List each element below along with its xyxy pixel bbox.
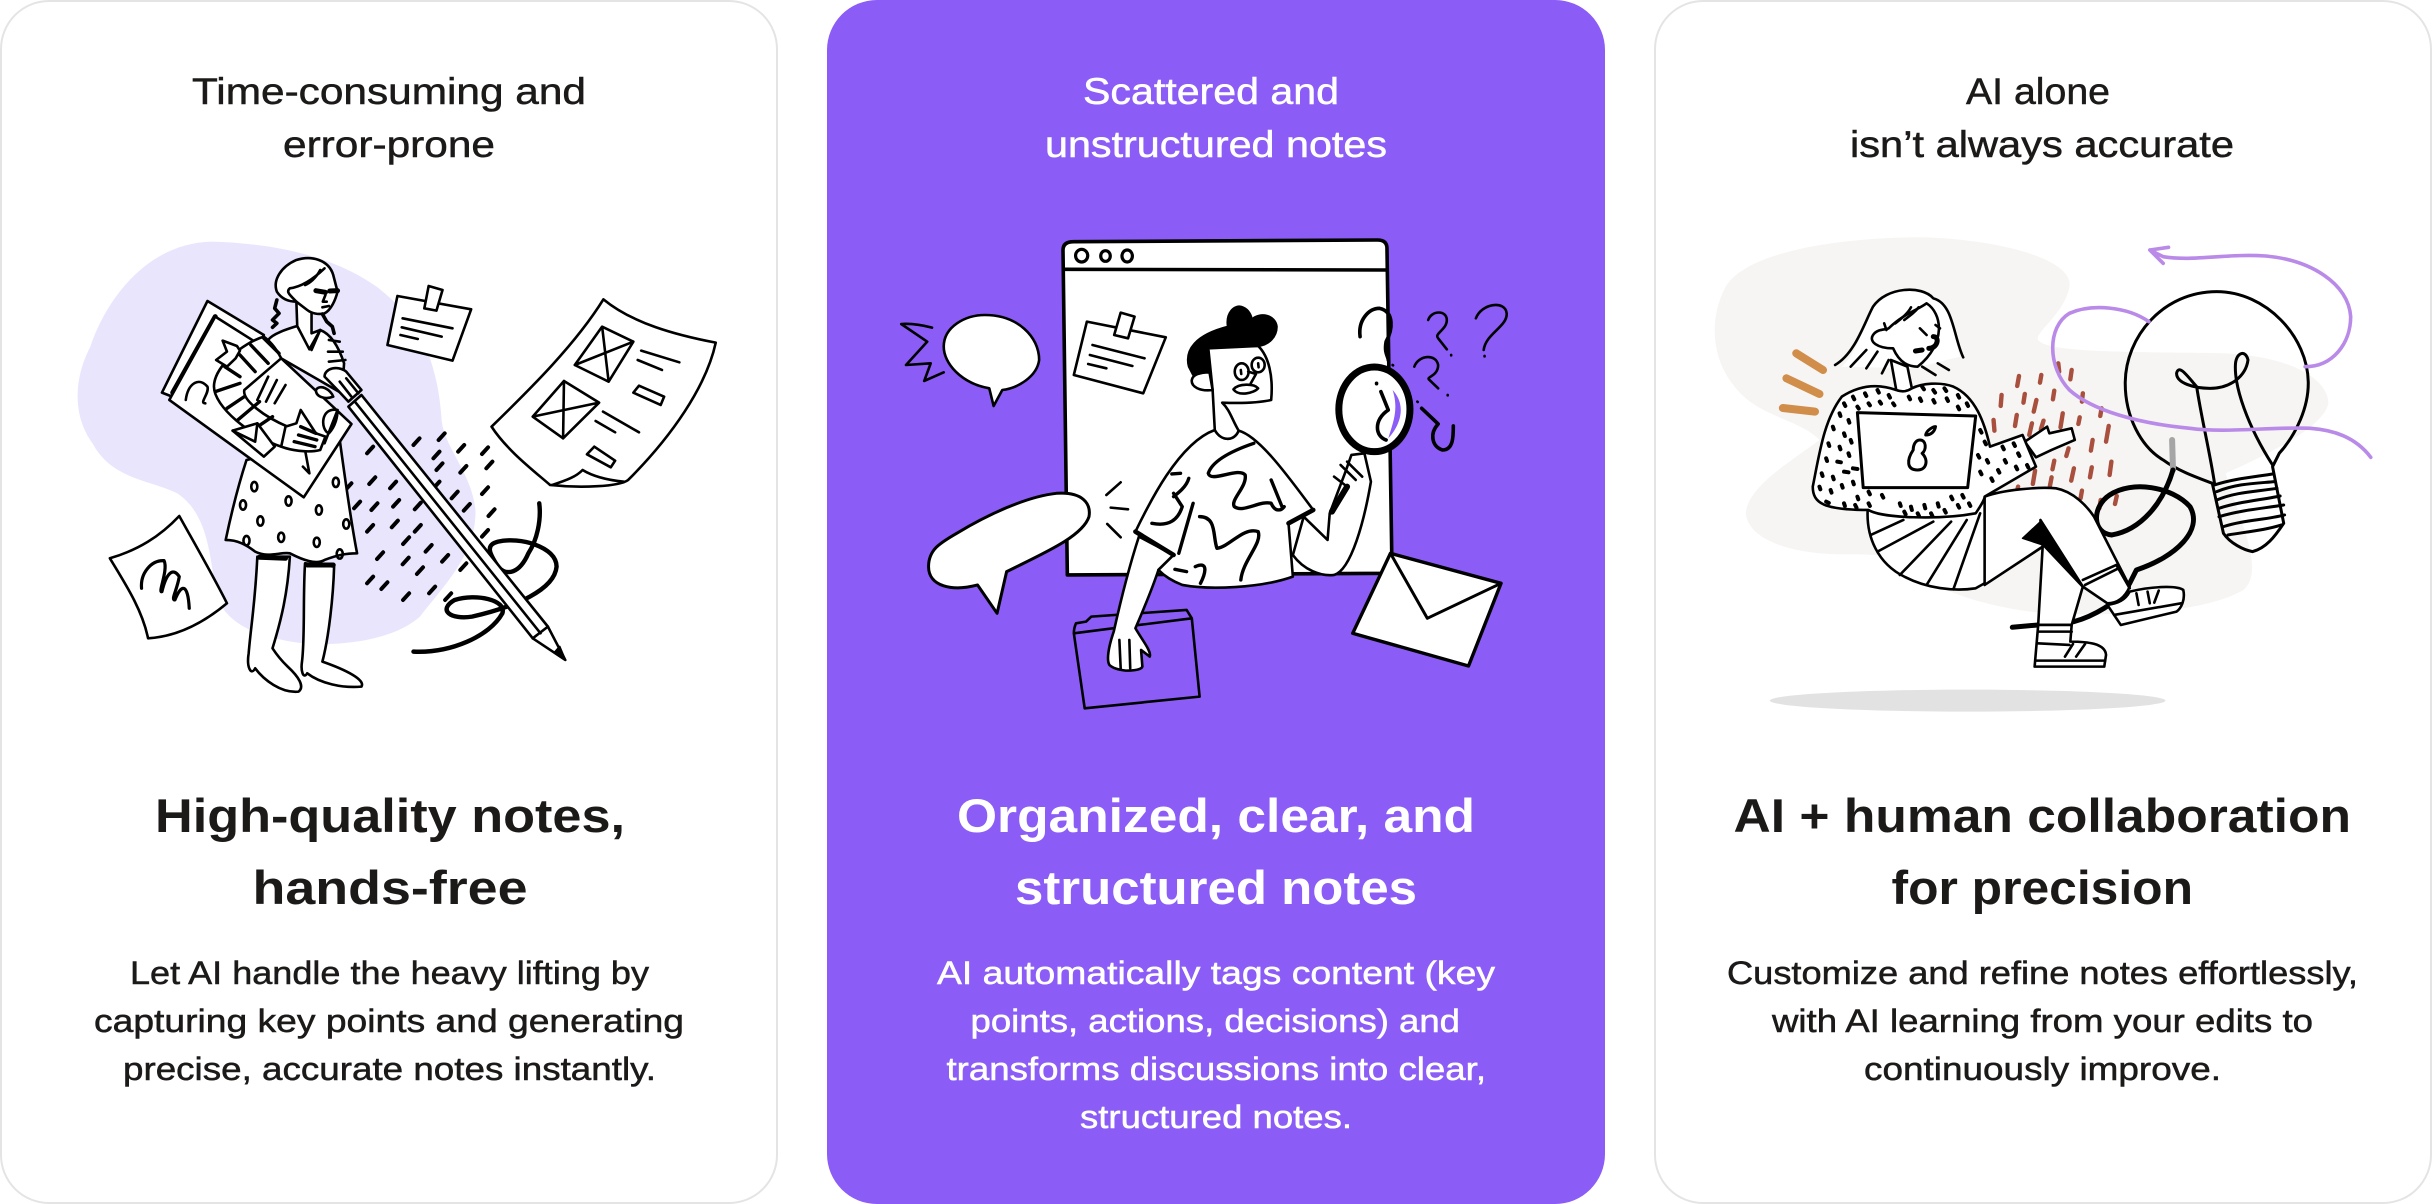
text: card 3 problem statement <box>1850 71 2234 165</box>
illustration: woman holding giant pencil <box>78 242 716 692</box>
panel: card 3 AI and human collaboration <box>1655 1 2431 1203</box>
icon: orange emphasis marks <box>1783 353 1823 412</box>
text: card 1 description <box>94 955 684 1087</box>
heading: card 1 benefit: High-quality notes, <box>155 789 625 842</box>
text: card 3 description <box>1727 955 2358 1087</box>
icon: pinned note <box>387 286 471 361</box>
figure: woman <box>162 258 362 692</box>
icon: light bulb <box>2125 292 2308 552</box>
text: card 2 description: points, actions, decisions) and <box>970 1003 1460 1039</box>
text: card 3 description: continuously improve. <box>1864 1051 2221 1087</box>
panel: card 1 high-quality notes <box>1 1 777 1203</box>
icon: speech bubble bottom <box>929 482 1128 613</box>
heading: card 1 benefit: hands-free <box>252 861 528 914</box>
icon: purple looping arrow <box>2053 247 2371 457</box>
heading: card 2 benefit <box>957 789 1475 914</box>
icon: speech bubble top <box>901 315 1039 406</box>
figure: man <box>1108 306 1371 671</box>
text: card 1 description: Let AI handle the heavy lifting by <box>130 955 649 991</box>
icon: question marks <box>1360 305 1507 450</box>
shadow: floor ellipse <box>1770 690 2165 712</box>
heading: card 2 benefit: structured notes <box>1015 861 1417 914</box>
illustration: woman with laptop and lightbulb <box>1715 237 2371 712</box>
heading: card 1 benefit <box>155 789 625 914</box>
text: card 3 description: Customize and refine notes effortlessly, <box>1727 955 2358 991</box>
heading: card 3 benefit: for precision <box>1892 861 2193 914</box>
text: card 1 problem statement: error-prone <box>283 124 495 165</box>
text: card 2 description: structured notes. <box>1080 1099 1352 1135</box>
icon: wireframe paper <box>492 299 716 487</box>
icon: bulb cord <box>2012 440 2193 627</box>
figure: woman with laptop <box>1813 290 2184 667</box>
text: card 3 description: with AI learning from your edits to <box>1771 1003 2313 1039</box>
heading: card 3 benefit: AI + human collaboration <box>1734 789 2351 842</box>
text: card 2 description: AI automatically tags content (key <box>937 955 1495 991</box>
heading: card 3 benefit <box>1734 789 2351 914</box>
text: card 1 description: capturing key points and generating <box>94 1003 684 1039</box>
text: card 3 problem statement: AI alone <box>1966 71 2110 112</box>
icon: envelope <box>1353 553 1501 666</box>
illustration: man with magnifier at browser window <box>901 240 1507 708</box>
text: card 2 problem statement: Scattered and <box>1083 71 1339 112</box>
text: card 2 description: transforms discussions into clear, <box>946 1051 1486 1087</box>
icon: scribbled paper <box>110 516 227 638</box>
text: card 1 description: precise, accurate notes instantly. <box>123 1051 656 1087</box>
text: card 1 problem statement <box>192 71 586 165</box>
text: card 2 description <box>937 955 1495 1135</box>
pattern: red dashes <box>1994 363 2117 508</box>
scribble: pencil line <box>413 503 557 652</box>
icon: pinned note <box>1074 313 1166 393</box>
heading: card 2 benefit: Organized, clear, and <box>957 789 1475 842</box>
text: card 1 problem statement: Time-consuming and <box>192 71 586 112</box>
icon: browser window <box>1063 240 1392 575</box>
text: card 2 problem statement <box>1045 71 1387 165</box>
icon: folder <box>1074 610 1200 708</box>
text: card 2 problem statement: unstructured notes <box>1045 124 1387 165</box>
icon: magnifying glass <box>1339 367 1410 452</box>
pattern: pencil shading dashes <box>345 433 495 600</box>
blob: lavender background <box>78 242 476 644</box>
text: card 3 problem statement: isn’t always accurate <box>1850 124 2234 165</box>
panel: card 2 organized notes <box>827 0 1605 1204</box>
icon: giant pencil <box>348 395 565 660</box>
blob: grey background <box>1715 237 2328 614</box>
